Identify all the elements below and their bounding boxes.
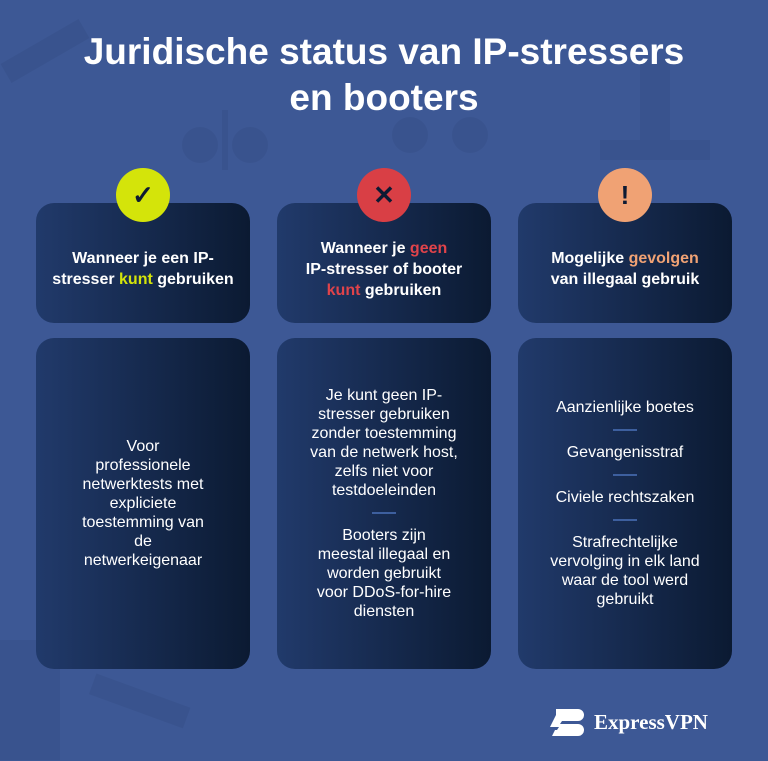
panel: can use body — [36, 338, 250, 669]
panel: can use body: toestemming van — [82, 514, 204, 531]
title: en booters — [289, 77, 479, 118]
panel: cannot use body: zelfs niet voor — [335, 463, 433, 480]
panel: cannot use body — [277, 338, 491, 669]
panel: cannot use body: diensten — [354, 603, 414, 620]
icon: cross — [357, 168, 411, 222]
panel: consequences header: Mogelijke gevolgen — [551, 250, 699, 267]
title — [84, 31, 684, 118]
panel: cannot use body: Je kunt geen IP- — [326, 387, 442, 404]
panel: can use body: Voor — [127, 438, 159, 455]
panel: consequences body: gebruikt — [597, 591, 653, 608]
panel: consequences body: Gevangenisstraf — [567, 444, 683, 461]
panel: can use header: Wanneer je een IP- — [72, 250, 214, 267]
title: Juridische status van IP-stressers — [84, 31, 684, 72]
panel: consequences body: waar de tool werd — [562, 572, 688, 589]
icon: exclamation — [598, 168, 652, 222]
panel: cannot use header — [277, 203, 491, 323]
panel: consequences body: Civiele rechtszaken — [556, 489, 694, 506]
panel: cannot use body: Booters zijn — [342, 527, 426, 544]
panel: cannot use body: stresser gebruiken — [318, 406, 450, 423]
panel: consequences body: Aanzienlijke boetes — [556, 399, 694, 416]
panel: can use body: netwerkeigenaar — [84, 552, 202, 569]
logo: ExpressVPN: ExpressVPN — [594, 710, 708, 734]
icon: cross: ✕ — [373, 180, 395, 210]
panel: can use body: netwerktests met — [83, 476, 203, 493]
panel: consequences body: vervolging in elk land — [550, 553, 700, 570]
panel: can use body: expliciete — [110, 495, 176, 512]
panel: cannot use body: testdoeleinden — [332, 482, 436, 499]
panel: cannot use body: worden gebruikt — [327, 565, 441, 582]
panel: cannot use header: kunt gebruiken — [327, 282, 441, 298]
panel: can use body: de — [134, 533, 152, 550]
panel: can use body: professionele — [95, 457, 191, 474]
panel: can use header: stresser kunt gebruiken — [52, 271, 234, 288]
panel: cannot use body: van de netwerk host, — [310, 444, 458, 461]
icon: check — [116, 168, 170, 222]
panel: cannot use body: voor DDoS-for-hire — [317, 584, 451, 601]
logo: ExpressVPN — [550, 709, 708, 736]
panel: cannot use header: IP-stresser of booter — [306, 260, 462, 278]
panel: consequences header: van illegaal gebruik — [551, 271, 699, 288]
icon: check: ✓ — [132, 180, 154, 210]
panel: cannot use body: zonder toestemming — [312, 425, 456, 442]
panel: cannot use header: Wanneer je geen — [321, 240, 447, 256]
panel: consequences body — [518, 338, 732, 669]
panel: consequences header — [518, 203, 732, 323]
panel: cannot use body: meestal illegaal en — [318, 546, 450, 563]
icon: exclamation: ! — [621, 180, 629, 210]
panel: can use header — [36, 203, 250, 323]
panel: consequences body: Strafrechtelijke — [572, 534, 678, 551]
